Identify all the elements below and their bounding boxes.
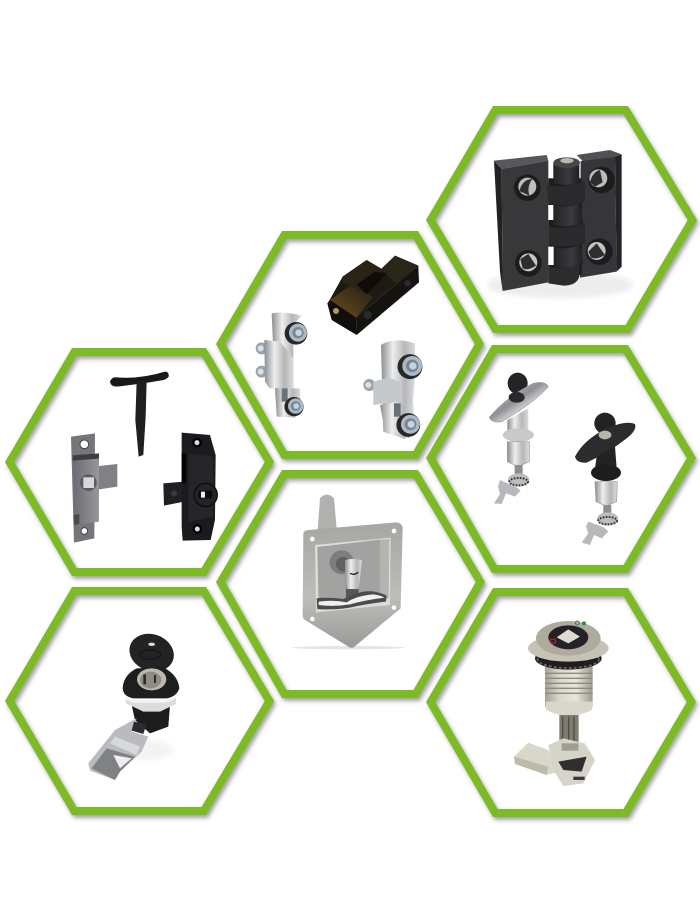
icon: metal latch: [71, 433, 117, 543]
icon: black T-handle lock: [575, 413, 635, 545]
hexagon frame: [10, 352, 269, 572]
hexagon frame: [221, 235, 479, 455]
hexagon frame: [431, 592, 691, 813]
panel: latches hexagon: [10, 352, 269, 572]
icon: quarter-turn lock: [514, 621, 609, 786]
icon: recessed T-handle latch: [292, 495, 405, 649]
icon: black block hinge: [327, 256, 419, 335]
hexagon frame: [10, 591, 269, 811]
icon: black latch: [163, 433, 217, 541]
icon: chrome hinge left: [256, 313, 307, 418]
icon: chrome T-handle lock: [489, 373, 548, 504]
panel: cam lock hexagon: [10, 591, 269, 811]
icon: black hinge: [487, 150, 633, 298]
icon: cam lock with key: [88, 628, 179, 780]
panel: quarter-turn lock hexagon: [431, 592, 691, 813]
panel: hinges hexagon: [221, 235, 479, 455]
panel: T-handle locks hexagon: [431, 349, 691, 569]
panel: hinge hexagon: [431, 110, 692, 329]
hexagon frame: [431, 349, 691, 569]
icon: T key: [110, 372, 169, 457]
panel: recessed T-handle latch hexagon: [221, 474, 480, 694]
hexagon frame: [431, 110, 692, 329]
hexagon frame: [221, 474, 480, 694]
icon: chrome hinge right: [363, 340, 422, 439]
